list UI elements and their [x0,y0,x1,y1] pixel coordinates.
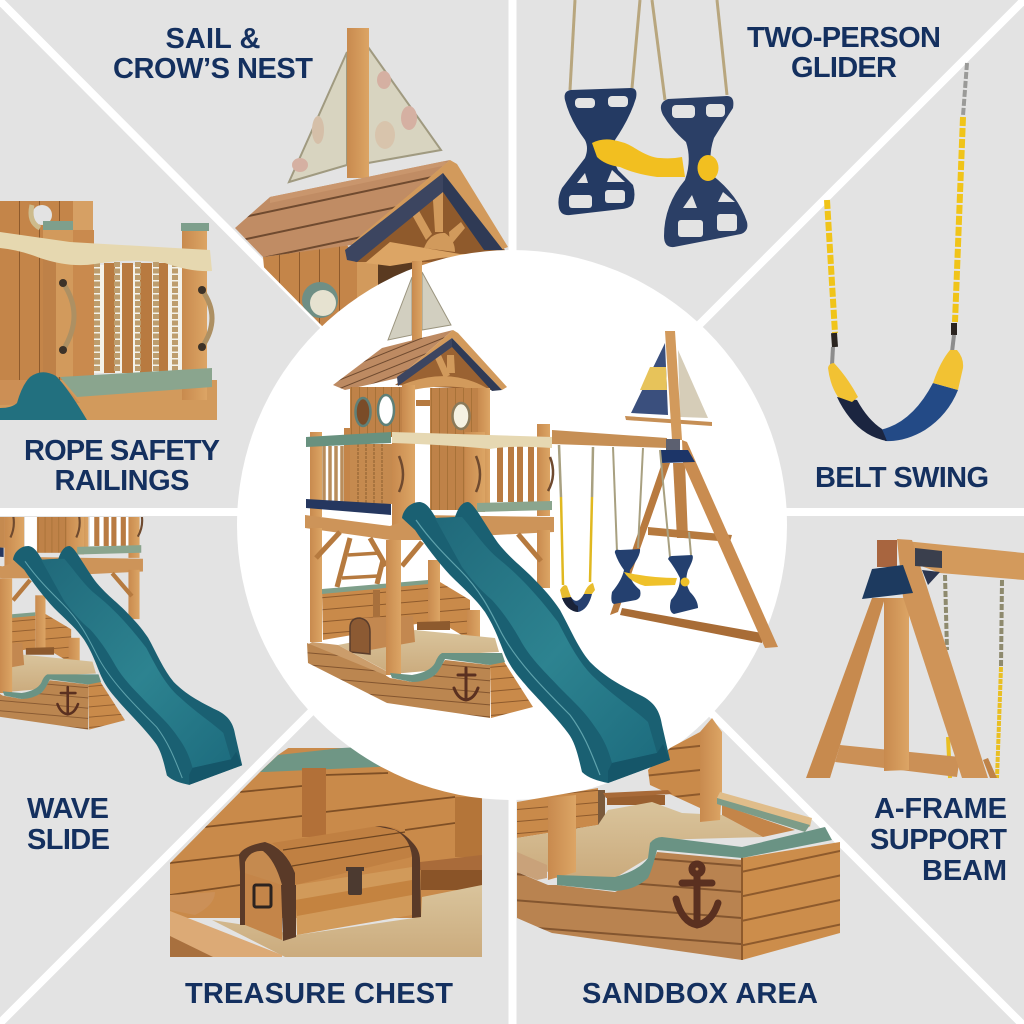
heading: a-frame support beam: A-FRAME [874,793,1007,825]
sail and roof of tower [333,261,507,394]
heading: rope safety railings [24,435,220,497]
illustration: chest [170,745,482,957]
central playset illustration [305,261,778,783]
panel: belt swing [815,63,989,494]
icon: anchor [676,864,718,925]
heading: sail and crow's nest [113,23,313,85]
heading: two-person glider [747,22,941,84]
heading: a-frame support beam: BEAM [922,855,1007,887]
heading: wave slide: SLIDE [27,824,110,856]
heading: a-frame support beam [870,793,1007,887]
small glider [611,447,698,614]
heading: sandbox area: SANDBOX AREA [582,978,818,1010]
illustration: slide [0,517,242,785]
small belt swing [559,445,595,612]
illustration: sail and roof [235,28,508,332]
heading: rope safety railings: RAILINGS [54,465,190,497]
illustration: a-frame [806,539,1024,778]
heading: wave slide: WAVE [27,793,109,825]
center circle [237,250,787,800]
heading: a-frame support beam: SUPPORT [870,824,1007,856]
tower, deck, sandbox hull and wave slide [305,385,670,783]
panel: sail and crow's nest [113,23,508,332]
panel: sandbox area [517,718,840,1010]
illustration: railings [0,201,217,420]
heading: wave slide [27,793,110,856]
panel: a-frame support beam [806,539,1024,887]
illustration: sandbox [517,718,840,960]
swing set frame [552,331,778,648]
heading: rope safety railings: ROPE SAFETY [24,435,220,467]
heading: belt swing: BELT SWING [815,462,989,494]
heading: sail and crow's nest: SAIL & [166,23,261,55]
illustration: glider [558,0,747,247]
panel: two-person glider [558,0,941,247]
heading: treasure chest: TREASURE CHEST [185,978,453,1010]
illustration: belt swing [827,63,967,441]
heading: two-person glider: GLIDER [791,52,897,84]
heading: sail and crow's nest: CROW’S NEST [113,53,313,85]
panel: wave slide [0,517,242,850]
panel: rope safety railings [0,201,220,497]
panel: treasure chest [170,745,482,1010]
heading: two-person glider: TWO-PERSON [747,22,941,54]
